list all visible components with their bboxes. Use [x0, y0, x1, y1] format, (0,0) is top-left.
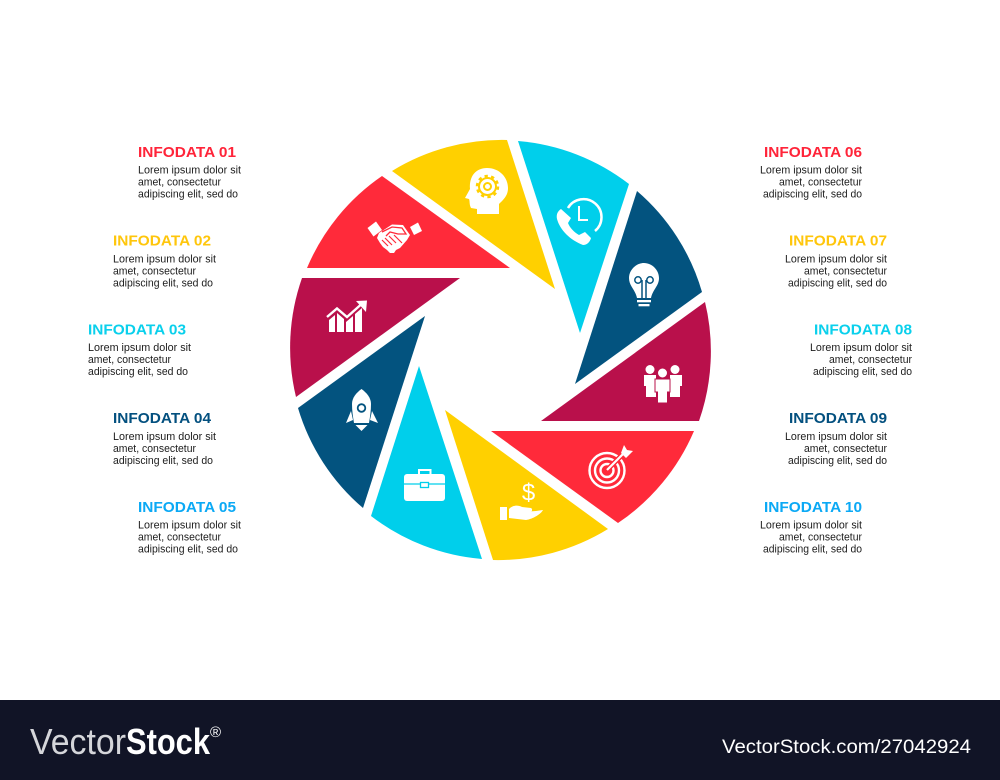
label: infodata 02: [113, 233, 216, 289]
footer logo: [30, 721, 211, 762]
segment 05: maroon: [541, 302, 711, 421]
label: infodata 08: INFODATA 08: [814, 321, 912, 338]
label: infodata 04: amet, consectetur: [113, 443, 196, 455]
label: infodata 06: [760, 144, 862, 200]
icon: target with arrow: [590, 445, 633, 488]
icon: handshake: [368, 222, 422, 253]
label: infodata 01: INFODATA 01: [138, 144, 236, 161]
footer url: VectorStock.com/27042924: [722, 737, 971, 758]
label: infodata 08: adipiscing elit, sed do: [813, 366, 912, 378]
icon: phone and clock: [557, 199, 601, 245]
label: infodata 08: amet, consectetur: [829, 354, 912, 366]
label: infodata 02: INFODATA 02: [113, 233, 211, 250]
label: infodata 10: Lorem ipsum dolor sit: [760, 520, 862, 532]
label: infodata 10: amet, consectetur: [779, 532, 862, 544]
footer registered mark: ®: [210, 724, 221, 741]
label: infodata 04: adipiscing elit, sed do: [113, 455, 213, 467]
label: infodata 03: Lorem ipsum dolor sit: [88, 342, 191, 354]
shutter wheel chart: [290, 140, 711, 560]
label: infodata 07: amet, consectetur: [804, 265, 887, 277]
label: infodata 05: amet, consectetur: [138, 532, 221, 544]
label: infodata 01: adipiscing elit, sed do: [138, 188, 238, 200]
icon: head with gear: [465, 168, 508, 214]
label: infodata 03: amet, consectetur: [88, 354, 171, 366]
label: infodata 02: adipiscing elit, sed do: [113, 277, 213, 289]
label: infodata 04: INFODATA 04: [113, 410, 212, 427]
label: infodata 06: adipiscing elit, sed do: [763, 188, 862, 200]
label: infodata 07: adipiscing elit, sed do: [788, 277, 887, 289]
label: infodata 02: amet, consectetur: [113, 265, 196, 277]
label: infodata 01: [138, 144, 241, 200]
icon: growth chart: [327, 300, 367, 332]
segment 02: yellow: [392, 140, 555, 289]
label: infodata 06: Lorem ipsum dolor sit: [760, 164, 862, 176]
label: infodata 07: INFODATA 07: [789, 233, 887, 250]
label: infodata 06: INFODATA 06: [764, 144, 862, 161]
label: infodata 09: amet, consectetur: [804, 443, 887, 455]
footer logo: Vector: [30, 721, 126, 762]
label: infodata 10: INFODATA 10: [764, 499, 862, 516]
segment 07: yellow: [445, 410, 608, 560]
label: infodata 09: [785, 410, 887, 467]
segment 10: maroon: [290, 278, 460, 397]
label: infodata 05: [138, 499, 241, 556]
segment 04: navy: [575, 191, 702, 384]
label: infodata 05: INFODATA 05: [138, 499, 236, 516]
icon: hand with dollar: $: [522, 480, 535, 506]
footer bar: [0, 700, 1000, 780]
label: infodata 01: Lorem ipsum dolor sit: [138, 164, 241, 176]
label: infodata 06: amet, consectetur: [779, 176, 862, 188]
label: infodata 10: adipiscing elit, sed do: [763, 544, 862, 556]
label: infodata 03: [88, 321, 191, 378]
segment 08: cyan: [371, 366, 482, 559]
label: infodata 08: [810, 321, 912, 378]
label: infodata 09: INFODATA 09: [789, 410, 887, 427]
segment 01: red: [307, 176, 510, 268]
icon: briefcase: [404, 470, 445, 501]
label: infodata 08: Lorem ipsum dolor sit: [810, 342, 912, 354]
label: infodata 07: Lorem ipsum dolor sit: [785, 253, 887, 265]
right labels column: [760, 144, 912, 556]
label: infodata 04: Lorem ipsum dolor sit: [113, 431, 216, 443]
label: infodata 09: adipiscing elit, sed do: [788, 455, 887, 467]
label: infodata 04: [113, 410, 216, 467]
label: infodata 07: [785, 233, 887, 289]
segment 09: navy: [298, 316, 425, 508]
label: infodata 01: amet, consectetur: [138, 176, 221, 188]
icon: team of people: [644, 365, 682, 403]
icon: light bulb: [629, 263, 659, 306]
footer logo: Stock: [126, 721, 211, 762]
label: infodata 03: INFODATA 03: [88, 321, 186, 338]
icon: rocket: [346, 389, 378, 431]
label: infodata 10: [760, 499, 862, 556]
left labels column: [88, 144, 241, 556]
label: infodata 05: Lorem ipsum dolor sit: [138, 520, 241, 532]
label: infodata 05: adipiscing elit, sed do: [138, 544, 238, 556]
segment 06: red: [491, 431, 694, 523]
label: infodata 03: adipiscing elit, sed do: [88, 366, 188, 378]
segment 03: cyan: [518, 141, 629, 333]
label: infodata 02: Lorem ipsum dolor sit: [113, 253, 216, 265]
icon: hand with dollar: [500, 480, 543, 520]
label: infodata 09: Lorem ipsum dolor sit: [785, 431, 887, 443]
